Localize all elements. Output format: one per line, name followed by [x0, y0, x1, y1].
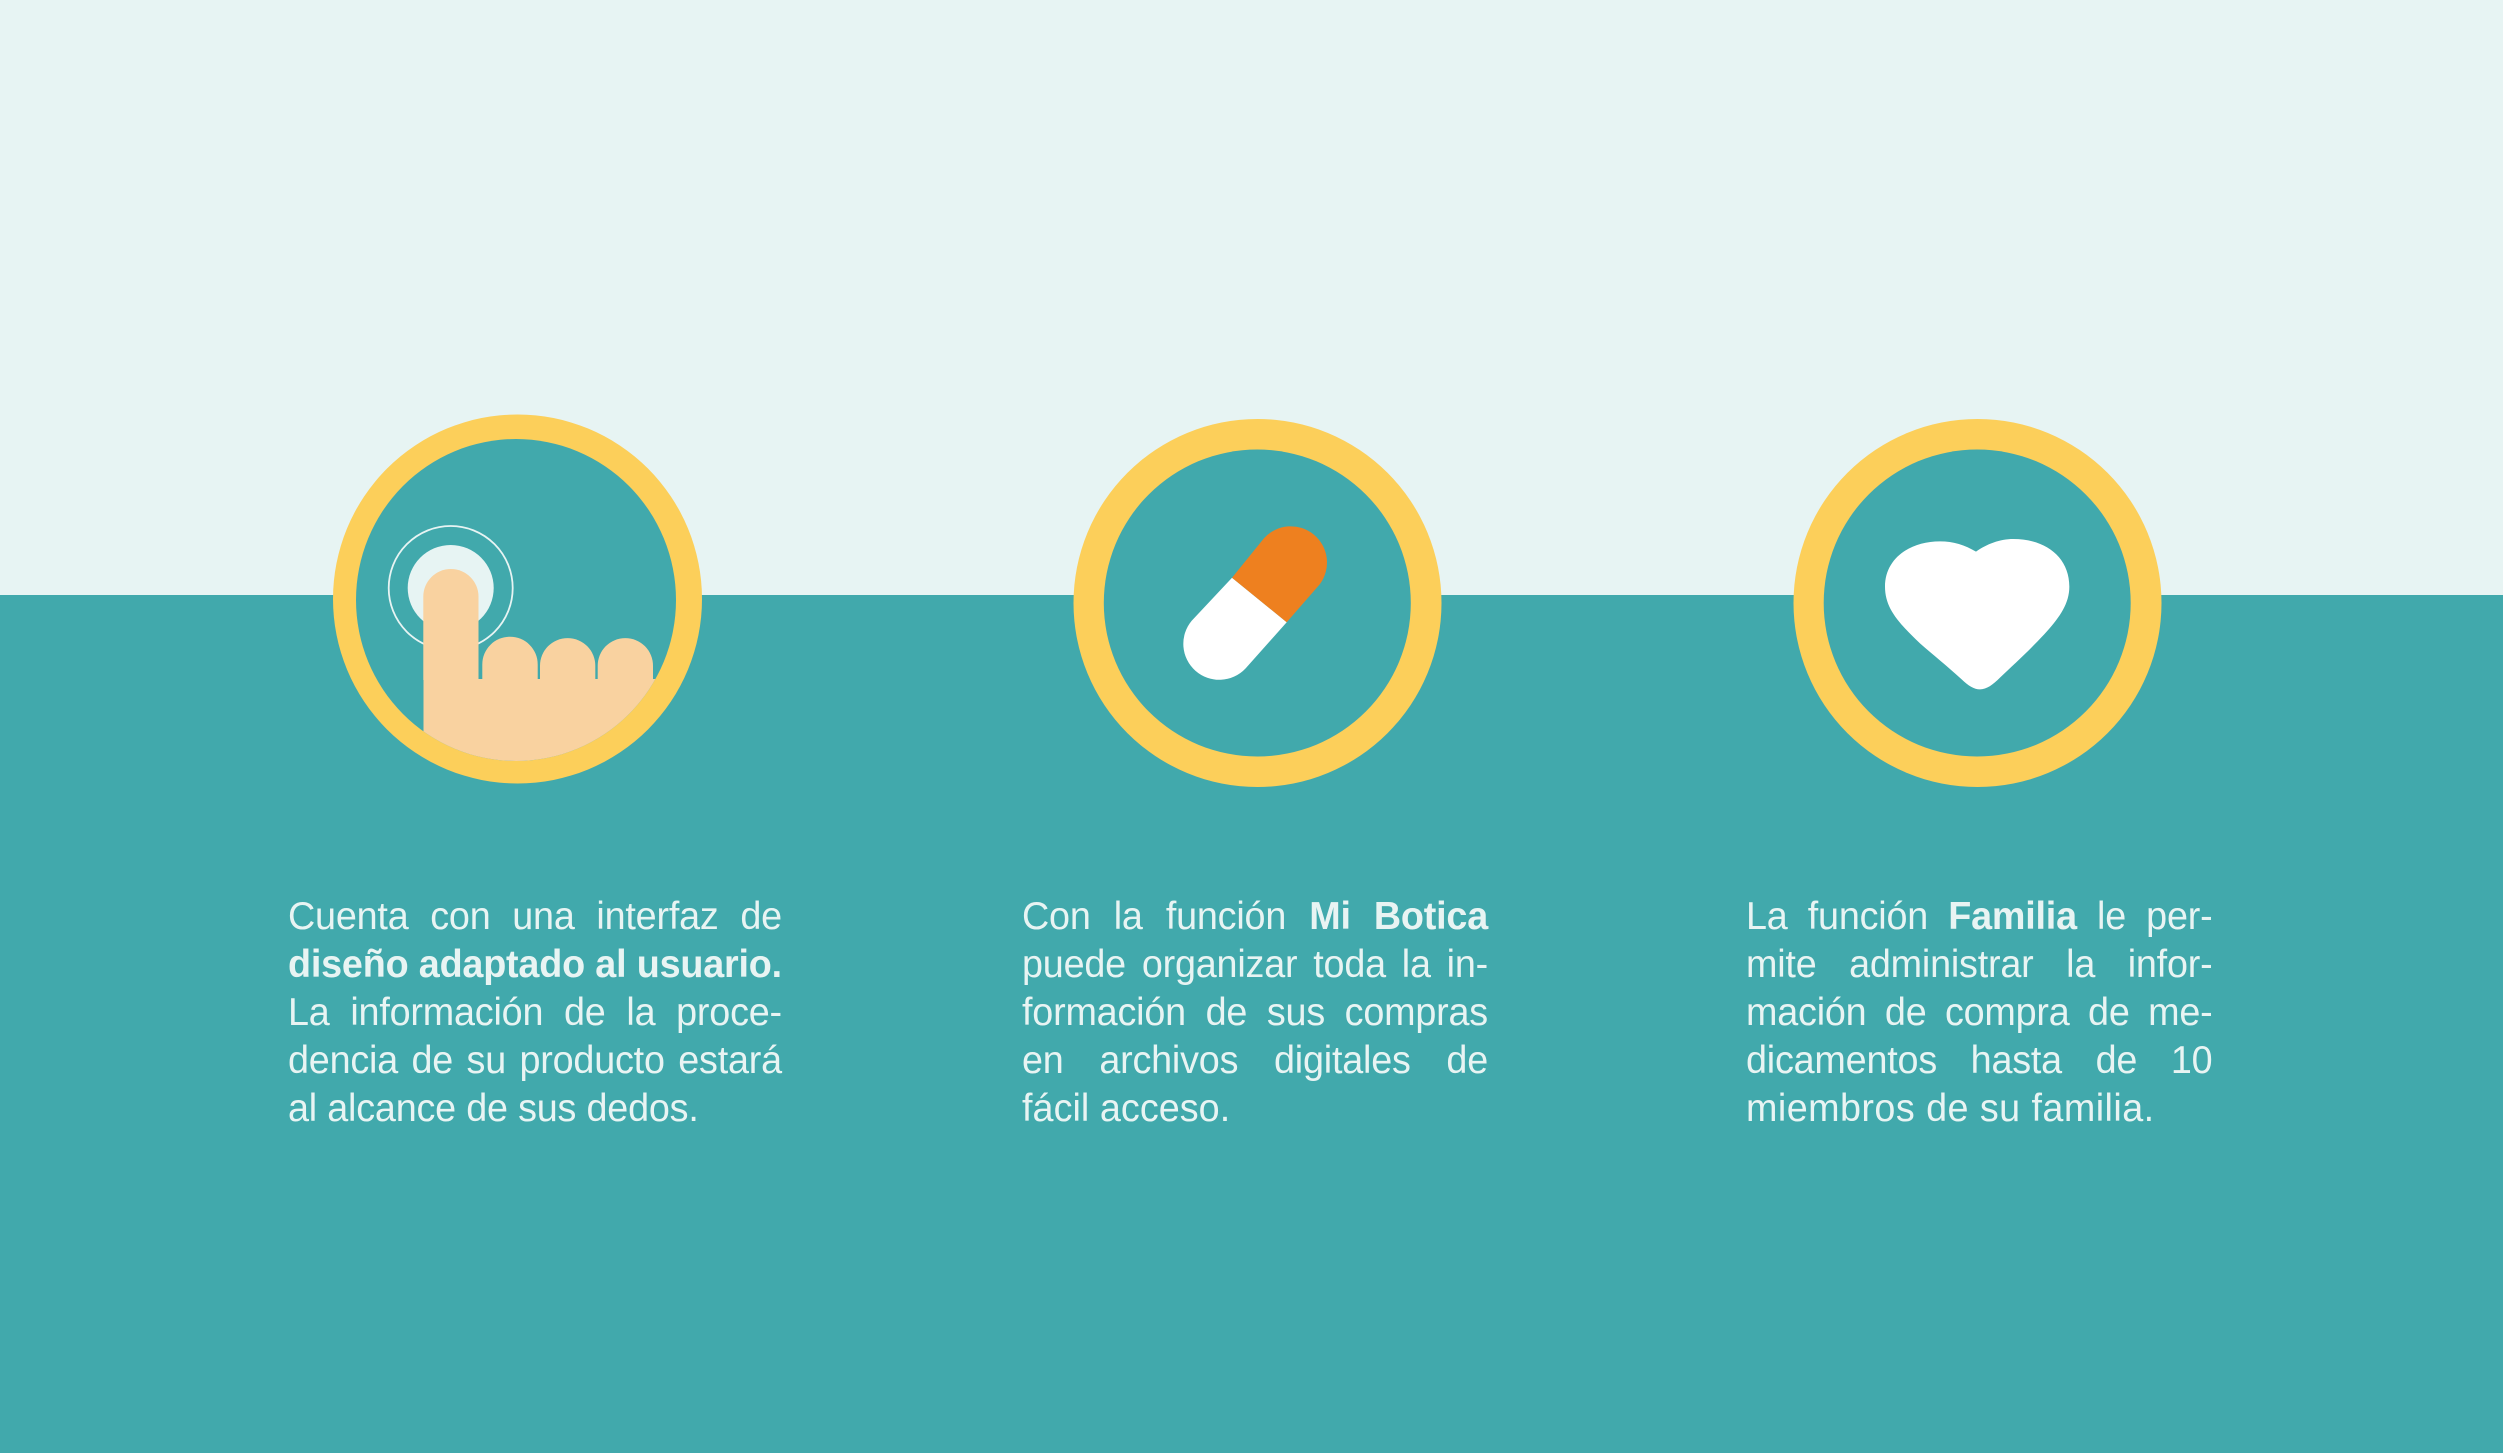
text block: user-adapted design: La información de la proce-: [288, 990, 782, 1034]
icon: heart in yellow circle: [1794, 419, 2162, 787]
icon: capsule in yellow circle: [1074, 419, 1442, 787]
touch ripple outer ring: [389, 526, 513, 650]
text block: Familia: dicamentos hasta de 10: [1746, 1038, 2212, 1082]
text block: Familia: mite administrar la infor-: [1746, 942, 2212, 986]
icon: hand tapping in yellow circle: [333, 414, 702, 784]
background: light upper band: [0, 0, 2503, 595]
text block: Mi Botica: formación de sus compras: [1022, 990, 1487, 1034]
text block: user-adapted design: [288, 894, 782, 1130]
text block: Mi Botica: [1022, 894, 1488, 1130]
text block: Mi Botica: Con la función Mi Botica: [1022, 894, 1487, 938]
capsule orange half: [1232, 526, 1327, 622]
background: teal lower band: [0, 595, 2503, 1453]
text block: Familia: miembros de su familia.: [1746, 1086, 2155, 1130]
hand: [423, 569, 656, 761]
text block: Mi Botica: fácil acceso.: [1022, 1086, 1230, 1130]
text block: user-adapted design: diseño adaptado al usuario.: [288, 942, 782, 986]
touch point: [408, 545, 494, 631]
text block: user-adapted design: dencia de su producto estará: [288, 1038, 782, 1082]
text block: Mi Botica: en archivos digitales de: [1022, 1038, 1487, 1082]
text block: Mi Botica: puede organizar toda la in-: [1022, 942, 1487, 986]
text block: Familia: mación de compra de me-: [1746, 990, 2212, 1034]
capsule white half: [1183, 578, 1287, 680]
text block: user-adapted design: al alcance de sus dedos.: [288, 1086, 699, 1130]
text block: Familia: [1746, 894, 2212, 1130]
heart: [1885, 539, 2069, 689]
text block: user-adapted design: Cuenta con una interfaz de: [288, 894, 782, 938]
text block: Familia: La función Familia le per-: [1746, 894, 2212, 938]
